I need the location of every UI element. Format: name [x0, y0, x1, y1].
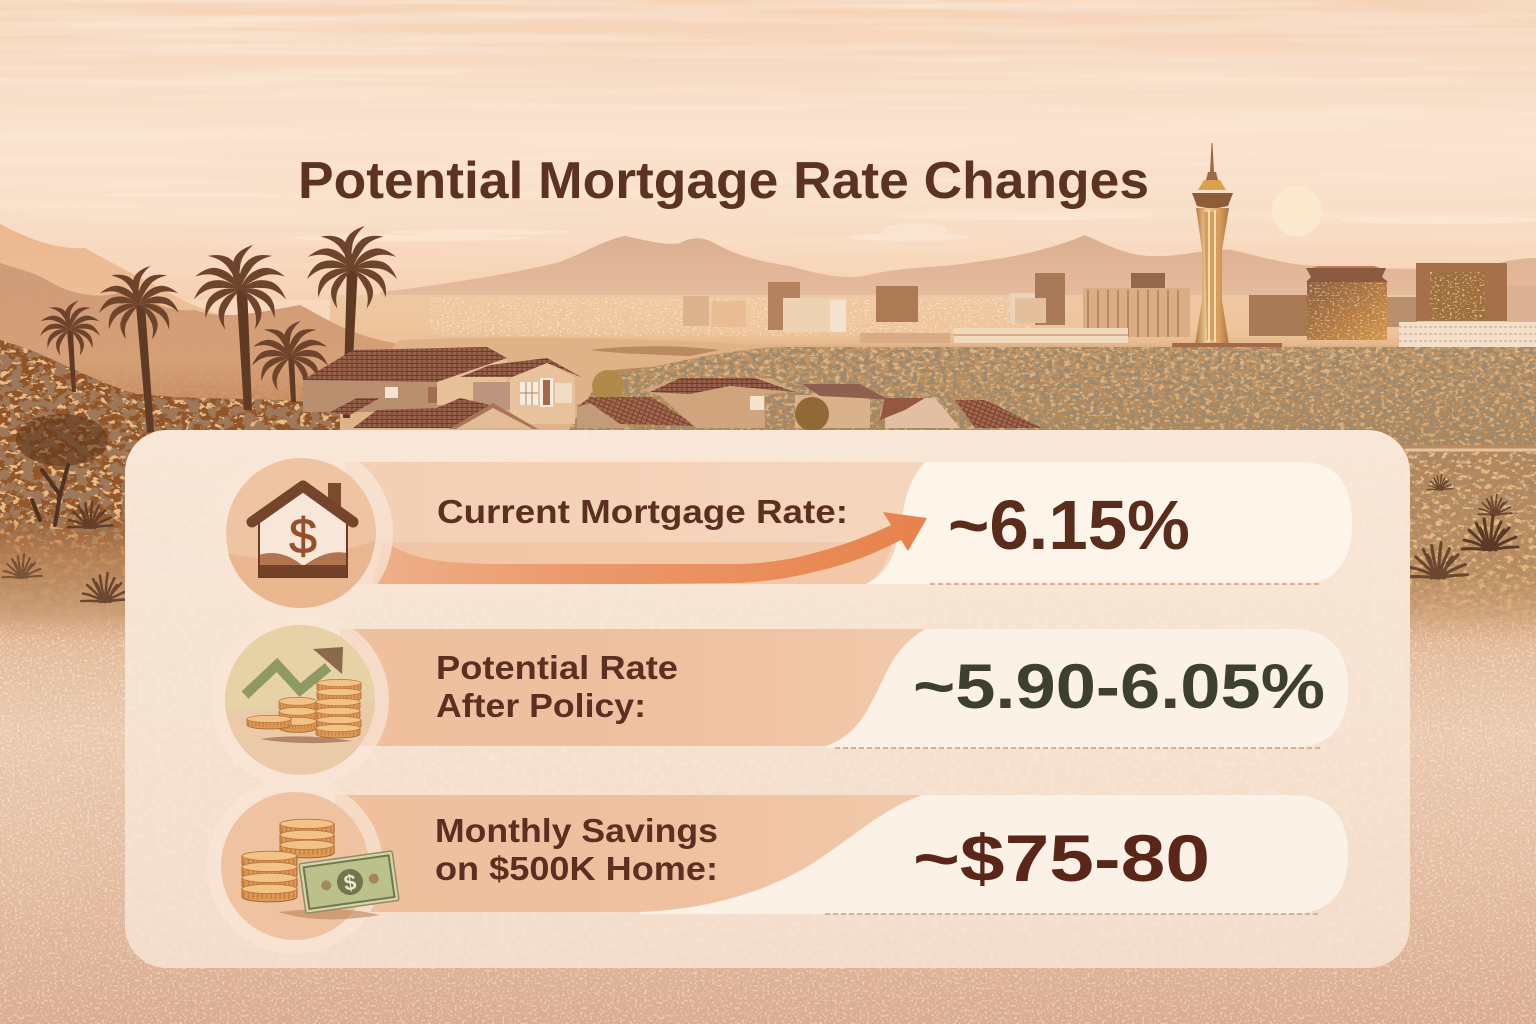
sun: [1272, 186, 1322, 236]
scrub right: [1405, 450, 1536, 642]
banknote: [299, 851, 399, 913]
value: savings: ~$75-80: [913, 821, 1210, 895]
valley floor: [300, 338, 1536, 440]
houses: [303, 347, 1042, 431]
left mountains: [0, 224, 470, 440]
stratosphere tower: [1172, 143, 1282, 347]
tree: [16, 414, 108, 525]
city foliage: [560, 347, 1536, 445]
desert ground: [0, 440, 1536, 1024]
main panel: [125, 430, 1410, 968]
label: current mortgage rate: Current Mortgage Rate:: [437, 493, 848, 530]
valley ridges: [590, 346, 730, 378]
label: monthly savings: on $500K Home:: [435, 850, 718, 887]
dollar sign: $: [289, 508, 317, 564]
agave plants: [2, 475, 1518, 602]
label: potential rate: After Policy:: [436, 687, 646, 724]
city haze: [330, 295, 1536, 355]
icon: rising chart and coins: [211, 611, 389, 789]
icon: coins and banknote: [207, 778, 399, 954]
banknote: $: [342, 869, 358, 896]
distant mountains: [380, 235, 1536, 330]
row 3: monthly savings: [335, 795, 1348, 914]
downtown skyline: [683, 263, 1536, 348]
clouds: [100, 193, 1536, 241]
title: Potential Mortgage Rate Changes: [298, 152, 1149, 210]
value: current rate: ~6.15%: [948, 486, 1190, 564]
value: potential rate: ~5.90-6.05%: [913, 652, 1325, 722]
palm trees: [40, 224, 397, 432]
scrub left: [0, 340, 340, 640]
row 2: potential rate: [340, 629, 1348, 748]
row 1: current mortgage rate: [345, 462, 1352, 584]
background sky: [0, 0, 1536, 300]
label: monthly savings: Monthly Savings: [435, 812, 718, 849]
label: potential rate: Potential Rate: [436, 649, 678, 686]
icon: house with dollar: [209, 441, 393, 625]
